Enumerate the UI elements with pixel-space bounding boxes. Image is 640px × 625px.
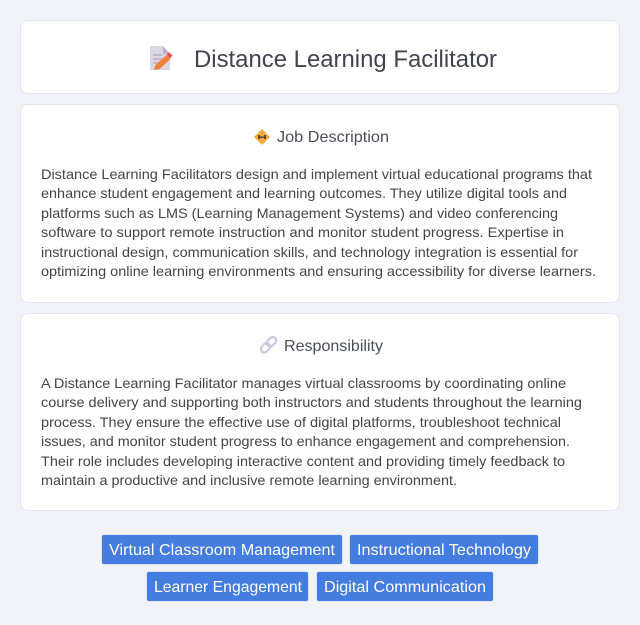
panel: responsibility card xyxy=(20,313,620,511)
tag: Virtual Classroom Management xyxy=(101,534,343,565)
text: responsibility xyxy=(41,375,582,488)
text: responsibility: Their role includes developing interactive content and providing timely feedback to xyxy=(41,453,565,469)
text: job description: platforms such as LMS (Learning Management Systems) and video conferencing xyxy=(41,205,558,221)
text: job description: software to support remote instruction and monitor student progress. Expertise in xyxy=(41,224,564,240)
tag labels: Digital Communication xyxy=(324,579,486,596)
text: job description: enhance student engagement and learning outcomes. They utilize digital tools and xyxy=(41,185,567,201)
text: job description: Distance Learning Facilitators design and implement virtual educational programs that xyxy=(41,166,592,182)
text: job description: optimizing online learning environments and ensuring accessibility for diverse learners. xyxy=(41,263,596,279)
panel: job description card xyxy=(20,104,620,303)
icon: diamond sign xyxy=(254,129,270,145)
text: responsibility: course delivery and supporting both instructors and students throughout the learning xyxy=(41,394,582,410)
tag labels: Virtual Classroom Management xyxy=(109,542,336,559)
tag labels: Learner Engagement xyxy=(154,579,303,596)
text: responsibility: maintain a productive and inclusive remote learning environment. xyxy=(41,472,457,488)
text: responsibility: A Distance Learning Facilitator manages virtual classrooms by coordinating online xyxy=(41,375,566,391)
icon: document with pencil xyxy=(150,46,172,70)
text: responsibility: issues, and monitor student progress to enhance engagement and comprehension. xyxy=(41,433,570,449)
heading: Responsibility: Responsibility xyxy=(284,338,383,355)
tag: Learner Engagement xyxy=(146,571,309,602)
text: responsibility: process. They ensure the effective use of digital platforms, troubleshoot technical xyxy=(41,414,561,430)
icon: chain link xyxy=(259,336,278,354)
title: Distance Learning Facilitator xyxy=(194,46,497,73)
tag labels: Instructional Technology xyxy=(357,542,531,559)
tag: Digital Communication xyxy=(316,571,494,602)
tag labels xyxy=(109,542,531,596)
tag: Instructional Technology xyxy=(349,534,539,565)
heading: Job Description: Job Description xyxy=(277,129,389,146)
text: job description xyxy=(41,166,596,279)
panel: title card xyxy=(20,20,620,94)
text: job description: instructional design, communication skills, and technology integration is essential for xyxy=(41,244,578,260)
